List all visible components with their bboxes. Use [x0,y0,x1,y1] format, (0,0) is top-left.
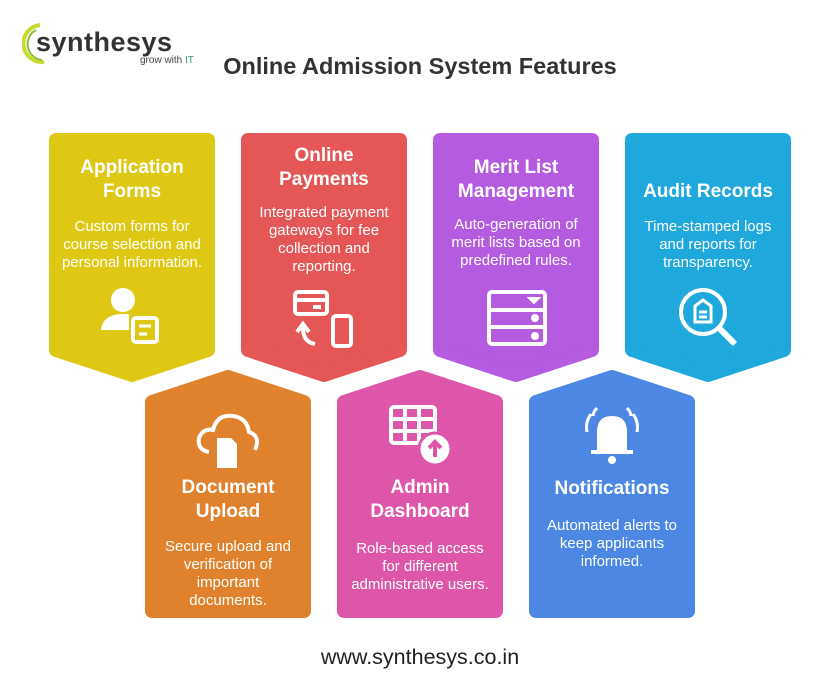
logo: synthesys [36,27,173,57]
panel: online payments: collection and [278,240,370,257]
logo [22,23,194,66]
panel: merit list: predefined rules. [460,252,572,269]
panel: merit list: Merit List [474,157,558,178]
panel: audit records: Audit Records [643,181,773,202]
panel: document upload: verification of [184,556,272,573]
panel: admin dashboard: Dashboard [370,501,470,522]
panel: document upload: Secure upload and [165,538,291,555]
panel: audit records: transparency. [663,254,753,271]
icon: bell [585,407,639,464]
panel: notifications: Automated alerts to [547,517,677,534]
panel: document upload: Upload [196,501,260,522]
icon: magnifier [679,288,738,346]
panel: notifications: informed. [581,553,643,570]
panel: admin dashboard: administrative users. [351,576,489,593]
logo: grow with IT [140,55,194,66]
panel: merit list: Auto-generation of [454,216,578,233]
panel: online payments: Integrated payment [259,204,389,221]
panel: application forms [62,157,202,344]
panel: application forms: Application [80,157,184,178]
panel: online payments: reporting. [292,258,356,275]
footer url: www.synthesys.co.in [321,645,519,669]
panel: application forms: Custom forms for [74,218,190,235]
panel: notifications: Notifications [554,478,670,499]
icon: list [487,290,547,346]
panel: online payments: Online [294,145,354,166]
panel: merit list: merit lists based on [451,234,581,251]
panel: application forms: Forms [103,181,161,202]
panel: online payments [259,145,389,348]
panel: audit records [643,181,773,346]
panel: merit list: Management [458,181,574,202]
panel: admin dashboard: Role-based access [356,540,484,557]
panel: application forms: personal information. [62,254,202,271]
title: Online Admission System Features [223,53,617,79]
icon: cloud document [196,414,259,468]
panel: audit records: and reports for [659,236,757,253]
panel: notifications [547,407,677,570]
icon: user form [101,288,159,344]
panel: admin dashboard [351,405,489,593]
panel: document upload: Document [182,477,274,498]
panel: document upload: important [197,574,259,591]
panel: document upload: documents. [189,592,267,609]
icon: card and phone [293,290,353,348]
icon: table upload [389,405,450,464]
panel: application forms: course selection and [63,236,201,253]
panel: online payments: gateways for fee [269,222,379,239]
panel: merit list [451,157,581,346]
panel: admin dashboard: Admin [390,477,450,498]
panel: admin dashboard: for different [382,558,458,575]
panel: online payments: Payments [279,169,369,190]
panel: notifications: keep applicants [560,535,664,552]
panel: document upload [165,414,291,609]
panel: audit records: Time-stamped logs [644,218,772,235]
